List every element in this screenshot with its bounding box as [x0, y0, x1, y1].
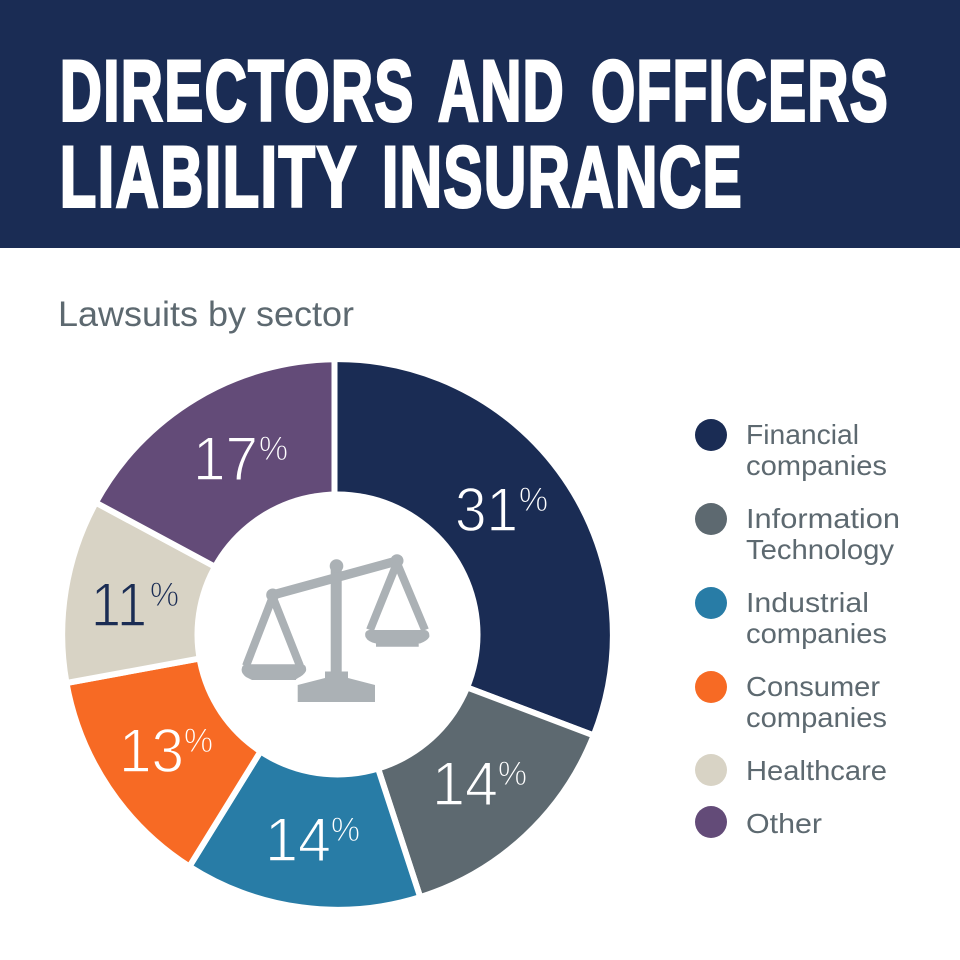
- chart subtitle: Lawsuits by sector: [58, 295, 354, 334]
- slice: consumer 13%: [66, 644, 305, 866]
- legend item: consumer companies: companies: [746, 702, 887, 733]
- legend item: financial companies: Financial: [746, 419, 859, 450]
- title: LIABILITY: [60, 130, 358, 226]
- value: 31%: 31: [455, 476, 518, 545]
- title: DIRECTORS: [60, 44, 415, 140]
- slice: information technology 14%: [349, 662, 594, 897]
- header banner: [0, 0, 960, 248]
- value: 14% industrial: %: [331, 811, 360, 849]
- legend item: information technology: Technology: [746, 534, 894, 565]
- donut hole: [194, 492, 480, 778]
- title: AND: [438, 44, 565, 140]
- icon: scales of justice: [242, 554, 429, 702]
- legend item: industrial companies: [695, 587, 887, 649]
- legend item: other: [695, 806, 822, 839]
- slice: other 17%: [96, 359, 334, 602]
- value: 17%: %: [259, 430, 288, 468]
- value: 11%: 11: [91, 571, 147, 640]
- slice: financial 31%: [334, 359, 613, 735]
- legend item: other: Other: [746, 808, 822, 839]
- value: 14% information technology: 14: [432, 750, 498, 819]
- value: 11%: %: [150, 576, 179, 614]
- legend item: consumer companies: Consumer: [746, 671, 880, 702]
- value: 14% industrial: 14: [265, 806, 331, 875]
- value: 14% information technology: %: [498, 755, 527, 793]
- legend: [695, 419, 900, 839]
- legend item: industrial companies: companies: [746, 618, 887, 649]
- legend item: industrial companies: Industrial: [746, 587, 869, 618]
- value: 13%: 13: [119, 717, 184, 786]
- legend item: financial companies: [695, 419, 887, 481]
- donut chart: [62, 359, 613, 910]
- title: [60, 44, 889, 226]
- value: 31%: %: [519, 481, 548, 519]
- legend item: healthcare: [695, 754, 887, 786]
- title: INSURANCE: [382, 130, 743, 226]
- legend item: information technology: [695, 503, 900, 565]
- slice: healthcare 11%: [62, 503, 280, 683]
- value: 17%: 17: [193, 425, 258, 494]
- value: 13%: %: [184, 722, 213, 760]
- legend item: information technology: Information: [746, 503, 900, 534]
- slice: industrial 14%: [189, 680, 420, 910]
- legend item: healthcare: Healthcare: [746, 755, 887, 786]
- legend item: consumer companies: [695, 671, 887, 733]
- legend item: financial companies: companies: [746, 450, 887, 481]
